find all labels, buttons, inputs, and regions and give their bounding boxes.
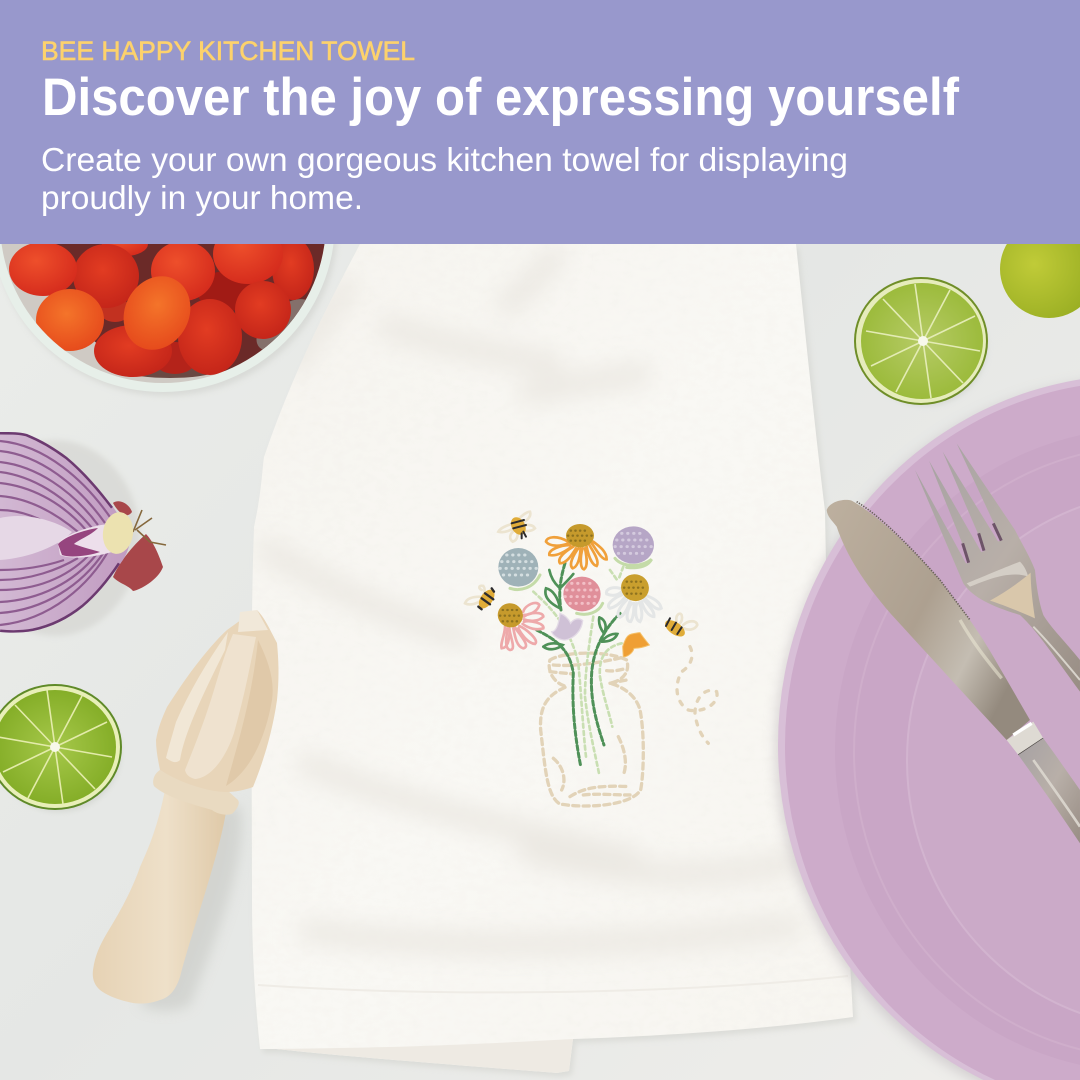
subheading xyxy=(41,141,848,216)
headline: Discover the joy of expressing yourself xyxy=(42,68,959,127)
embroidery: jar bouquet and bees xyxy=(465,512,717,806)
subheading: Create your own gorgeous kitchen towel for displaying xyxy=(41,141,848,178)
red onion half xyxy=(0,430,166,636)
orange tulip xyxy=(623,633,649,657)
mason jar outline xyxy=(541,653,643,806)
lime half, lower left xyxy=(0,684,122,812)
blue clover xyxy=(498,548,540,590)
onion root plate xyxy=(100,510,136,556)
pink echinacea flower xyxy=(494,600,543,650)
lavender tulip xyxy=(552,613,583,640)
orange echinacea flower xyxy=(546,524,607,569)
subheading: proudly in your home. xyxy=(41,179,363,216)
onion papery skin and roots xyxy=(113,501,166,591)
header banner xyxy=(0,0,1080,244)
wooden citrus reamer xyxy=(93,610,278,1011)
eyebrow: BEE HAPPY KITCHEN TOWEL xyxy=(41,36,415,66)
bee top xyxy=(498,512,535,542)
pink clover xyxy=(563,577,603,614)
fork xyxy=(915,443,1080,692)
bee trail xyxy=(677,647,717,743)
plate xyxy=(775,375,1080,1080)
bowl of cherry tomatoes xyxy=(2,244,337,396)
whole lime, top right xyxy=(1000,220,1080,318)
lime half, upper right xyxy=(854,277,988,406)
white daisy xyxy=(606,570,661,622)
bee right xyxy=(662,614,697,640)
stems xyxy=(533,567,623,773)
bee left xyxy=(465,586,498,611)
knife xyxy=(827,500,1080,843)
purple clover xyxy=(613,526,654,568)
towel xyxy=(240,240,870,1080)
